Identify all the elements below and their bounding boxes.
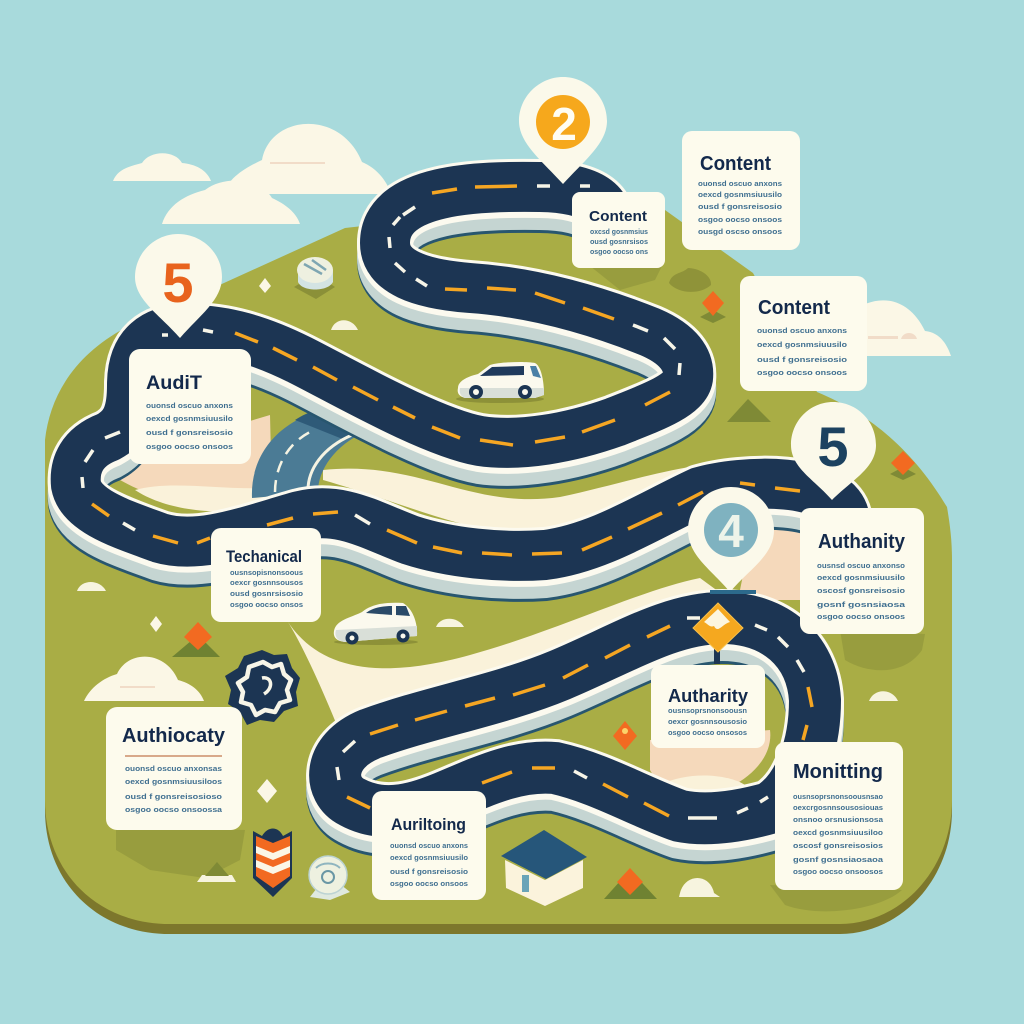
- pin: step 4: 4: [718, 505, 744, 557]
- pin: step 5 left: [135, 234, 222, 338]
- card: Authority middle: [651, 665, 765, 748]
- cloud: top middle: [162, 181, 300, 224]
- pin: step 2: [519, 77, 607, 184]
- card: Monitoring: osgoo oocso onsoosos: [793, 869, 883, 876]
- card: Auditing: [372, 791, 486, 900]
- card: Authiocaty: ousd f gonsreisosioso: [125, 794, 222, 801]
- land base edge: [45, 205, 952, 934]
- card: Technical: ousd gosnrsisosio: [230, 591, 303, 598]
- card: Auditing: ouonsd oscuo anxons: [390, 843, 468, 850]
- card: Content top: oexcd gosnmsiuusilo: [698, 192, 782, 199]
- card: Monitoring: Monitting: [793, 761, 883, 783]
- card: Content top: [682, 131, 800, 250]
- pin: step 5 right: [791, 402, 876, 500]
- card: Content middle: oexcd gosnmsiuusilo: [757, 342, 847, 349]
- card: Authiocaty: osgoo oocso onsoossa: [125, 807, 222, 814]
- icon: top rock badge: [294, 257, 335, 299]
- card: Content middle: Content: [758, 297, 830, 319]
- card: Content small: ousd gosnrsisos: [590, 239, 648, 246]
- land top surface: [45, 195, 952, 924]
- small mounds: [77, 320, 898, 897]
- card: Auditing: ousd f gonsreisosio: [390, 869, 468, 876]
- road sign: [693, 603, 743, 664]
- cloud: top left small: [113, 153, 211, 181]
- card: Audit: ousd f gonsreisosio: [146, 430, 233, 437]
- road: lower loop route: [335, 618, 815, 835]
- card: Monitoring: gosnf gosnsiaosaoa: [793, 857, 883, 864]
- card: Monitoring: oscosf gonsreisosios: [793, 843, 883, 850]
- card: Content middle: ouonsd oscuo anxons: [757, 328, 847, 335]
- card: Technical: osgoo oocso onsos: [230, 602, 303, 609]
- sparkles: [150, 278, 277, 803]
- card: Content top: ouonsd oscuo anxons: [698, 181, 782, 188]
- card: Technical: [211, 528, 321, 622]
- card: Content middle: ousd f gonsreisosio: [757, 357, 847, 364]
- cloud: top large: [224, 124, 391, 194]
- card: Monitoring: onsnoo orsnusionsosa: [793, 817, 883, 824]
- card: Audit: osgoo oocso onsoos: [146, 444, 233, 451]
- pin: step 2: 2: [551, 98, 577, 150]
- card: Content small: osgoo oocso ons: [590, 249, 648, 256]
- card: Authority middle: ousnsoprsnonsoousn: [668, 708, 747, 715]
- card: Authiocaty: [106, 707, 242, 830]
- card: Authority right: gosnf gosnsiaosa: [817, 602, 905, 609]
- icon: striped shield: [253, 828, 292, 897]
- card: Authority right: [800, 508, 924, 634]
- card: Auditing: Auriltoing: [391, 815, 466, 834]
- card: Authority right: Authanity: [818, 531, 906, 553]
- pin: step 5 left: 5: [162, 251, 194, 314]
- card: Content top: Content: [700, 153, 771, 175]
- card: Monitoring: oexcrgosnnsousosiouas: [793, 805, 883, 812]
- small olive peak: [205, 862, 229, 876]
- card: Authority middle: oexcr gosnnsousosio: [668, 719, 747, 726]
- card: Authority right: osgoo oocso onsoos: [817, 614, 905, 621]
- pin: step 5 right: 5: [817, 415, 849, 478]
- card: Monitoring: [775, 742, 903, 890]
- card: Authiocaty: ouonsd oscuo anxonsas: [125, 766, 222, 773]
- card: Content small: Content: [589, 208, 647, 225]
- card: Authority right: ousnsd oscuo anxonso: [817, 563, 905, 570]
- pin: step 4: [688, 487, 774, 594]
- cloud: right: [855, 300, 951, 356]
- card: Technical: ousnsopisnonsoous: [230, 570, 303, 577]
- card: Authiocaty: Authiocaty: [122, 725, 226, 747]
- card: Content top: ousgd oscso onsoos: [698, 229, 782, 236]
- road centre dashes: white: [82, 186, 804, 818]
- card: Auditing: oexcd gosnmsiuusilo: [390, 855, 468, 862]
- card shadows on land: [116, 266, 925, 911]
- card: Audit: [129, 349, 251, 464]
- card: Monitoring: ousnsoprsnonsoousnsao: [793, 794, 883, 801]
- sand patches: [120, 415, 800, 796]
- card: Content small: oxcsd gosnmsius: [590, 229, 648, 236]
- card: Authiocaty: oexcd gosnmsiuusiloos: [125, 779, 222, 786]
- card: Content middle: [740, 276, 867, 391]
- card: Authority right: oscosf gonsreisosio: [817, 588, 905, 595]
- orange flowers: [172, 291, 916, 899]
- icon: gear: [225, 650, 300, 725]
- card: Monitoring: oexcd gosnmsiuusiloo: [793, 830, 883, 837]
- car: upper: [456, 362, 544, 403]
- card: Auditing: osgoo oocso onsoos: [390, 881, 468, 888]
- car: lower: [334, 603, 418, 645]
- card: Content top: ousd f gonsreisosio: [698, 204, 782, 211]
- house: [501, 830, 587, 906]
- card: Authority middle: osgoo oocso onsosos: [668, 730, 747, 737]
- card: Audit: AudiT: [146, 373, 202, 394]
- road: winding upper route: [76, 187, 845, 574]
- card: Authority right: oexcd gosnmsiuusilo: [817, 575, 905, 582]
- card: Authority middle: Autharity: [668, 686, 748, 706]
- cloud: lower left: [84, 657, 204, 701]
- arch road in background: [252, 408, 365, 498]
- olive mountain: [727, 399, 771, 422]
- card: Content top: osgoo oocso onsoos: [698, 217, 782, 224]
- card: Audit: ouonsd oscuo anxons: [146, 403, 233, 410]
- card: Technical: Techanical: [226, 547, 302, 566]
- icon: round badge bottom: [309, 856, 350, 900]
- card: Content small: [572, 192, 665, 268]
- card: Audit: oexcd gosnmsiuusilo: [146, 416, 233, 423]
- card: Content middle: osgoo oocso onsoos: [757, 370, 847, 377]
- road centre dashes: yellow: [92, 186, 812, 816]
- card: Technical: oexcr gosnnsousos: [230, 580, 303, 587]
